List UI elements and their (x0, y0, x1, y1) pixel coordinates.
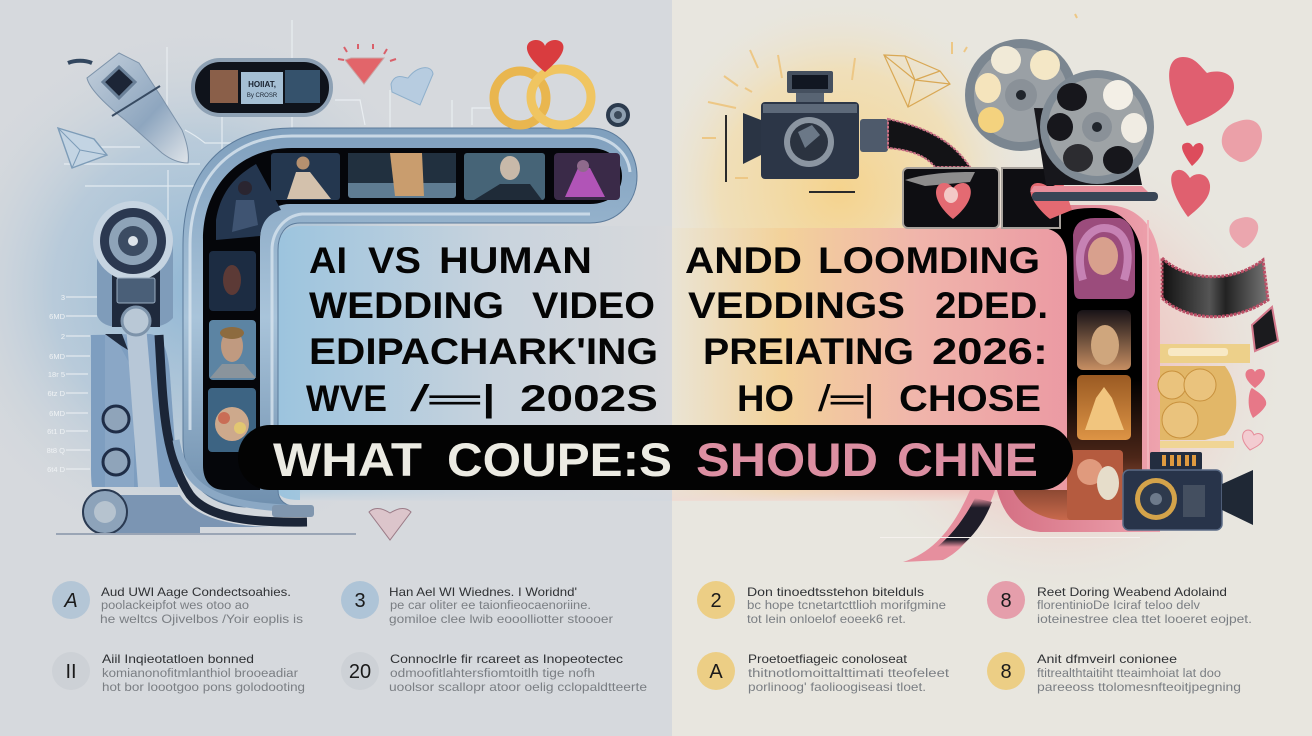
icon: knob upper (103, 406, 129, 432)
title block right: VEDDINGS (688, 285, 905, 326)
scale tick labels: 18r 5 (48, 370, 65, 379)
icon: pill screen: HOIIAT, (248, 80, 276, 89)
icon: ring heart (527, 40, 564, 72)
scale tick labels: 6MD (49, 312, 66, 321)
icon: film ribbon bottom (903, 490, 995, 562)
item: right column 2 row 2: 8 (1000, 661, 1012, 683)
item: left column 1 row 2 (52, 652, 305, 694)
icon: film reel back (965, 39, 1077, 151)
film connector (860, 119, 888, 152)
item: right column 1 row 2: thitnotlomoittalttimati tteofeleet (748, 668, 950, 680)
icon: wheel (83, 490, 127, 534)
base track (105, 495, 270, 534)
film frame: portrait 7 (209, 320, 256, 380)
title block left: HUMAN (439, 240, 592, 281)
screen panel 1 with heart (903, 168, 999, 228)
icon: pivot (122, 307, 150, 335)
text panel right (672, 228, 1067, 500)
icon: film ribbon right (1162, 258, 1278, 351)
film frame: pink-haired portrait (1073, 218, 1135, 299)
decorative white rule (880, 537, 1140, 538)
item: right column 2 row 1 (987, 581, 1252, 626)
item: right column 2 row 1: Reet Doring Weabend Adolaind (1037, 585, 1227, 599)
item: right column 2 row 2: pareeoss ttolomesnfteoitjpegning (1037, 680, 1241, 694)
item: right column 1 row 1: tot lein onloelof eoeek6 ret. (747, 612, 906, 626)
machine base (91, 334, 178, 487)
item: right column 2 row 1: florentinioDe Iciraf teloo delv (1037, 600, 1200, 612)
background: left half (0, 0, 672, 736)
illustration: left film machine (56, 128, 637, 535)
title block left: WVE (306, 378, 387, 419)
item: left column 1 row 1 (52, 581, 303, 626)
illustration: right film machine (997, 205, 1160, 532)
scale tick labels: 2 (61, 332, 65, 341)
item: left column 2 row 1: 3 (354, 590, 366, 612)
item: right column 1 row 2: A (709, 661, 723, 683)
title block right: 2026: (932, 331, 1048, 372)
icon: camcorder (1123, 452, 1253, 530)
icon: gold gem outline (884, 55, 950, 107)
icon: pill screen: By CROSR (247, 93, 278, 99)
icon: small heart (1182, 143, 1204, 166)
item: left column 2 row 2: Connoclrle fir rcareet as Inopeotectec (390, 652, 623, 666)
lower tube curve (159, 335, 307, 522)
icon: small hearts column (1243, 369, 1266, 450)
icon: rose small (1229, 217, 1258, 248)
icon: film reel front (1040, 70, 1154, 184)
title block left (306, 240, 658, 419)
headline left text: WHAT (273, 433, 422, 486)
icon: outline gem left (58, 128, 107, 168)
icon: bottom gem heart (369, 508, 411, 540)
item: right column 2 row 1: ioteinestree clea ttet looeret eojpet. (1037, 612, 1252, 626)
film frame: portrait 4 (464, 153, 545, 200)
icon: wedding rings (494, 40, 591, 125)
text panel left (278, 226, 672, 500)
film strip: black band (1013, 208, 1142, 520)
item: left column 2 row 1 (341, 581, 613, 626)
title block left: WEDDING (309, 285, 504, 326)
machine head (97, 240, 173, 327)
item: left column 2 row 1: pe car oliter ee taionfieocaenoriine. (390, 600, 591, 612)
icon: round lens (93, 201, 173, 281)
film strip: black band (203, 148, 622, 490)
headline right text: CHNE (897, 433, 1038, 486)
icon: pink rose heart (1222, 120, 1262, 162)
item: left column 1 row 2: komianonofitmlanthiol brooeadiar (102, 668, 298, 680)
title block left: 2002S (520, 378, 658, 419)
title block right: LOOMDING (818, 240, 1040, 281)
title block right: 2DED. (935, 285, 1048, 326)
icon: big heart (1169, 57, 1234, 126)
scale tick labels: 6t4 D (47, 465, 66, 474)
title block left: AI (309, 240, 347, 281)
title block left: VS (368, 240, 421, 281)
item: left column 1 row 1: poolackeipfot wes otoo ao (101, 600, 249, 612)
item: left column 2 row 2: uoolsor scallopr atoor oelig cclopaldtteerte (389, 680, 647, 694)
item: left column 1 row 1: Aud UWI Aage Condectsoahies. (101, 585, 291, 599)
title block right: HO (737, 378, 794, 419)
icon: handheld camera (68, 53, 188, 163)
film frame: portrait 6 (209, 251, 256, 311)
scale tick labels: 6MD (49, 352, 66, 361)
item: left column 2 row 1: Han Ael WI Wiednes. I Woridnd' (389, 585, 577, 599)
machine vent (117, 278, 155, 303)
item: right column 1 row 1: 2 (710, 590, 722, 612)
film frame: portrait 3 (348, 153, 456, 198)
item: left column 2 row 1: gomiloe clee lwib eooolliotter stoooer (389, 612, 613, 626)
film frame: portrait 1 (216, 164, 281, 240)
tube frame: blue metal (183, 128, 637, 507)
scale tick labels: 3 (61, 293, 65, 302)
icon: blue gem heart (391, 68, 433, 105)
title block right: PREIATING (703, 331, 914, 372)
screen panel 2 with heart (1002, 168, 1072, 228)
title block right: CHOSE (899, 378, 1041, 419)
scale tick labels: 8t8 Q (47, 446, 65, 455)
background: right half (672, 0, 1312, 736)
item: left column 1 row 2: hot bor loootgoo pons golodooting (102, 680, 305, 694)
item: left column 1 row 2: Aiil Inqieotatloen bonned (102, 652, 254, 666)
machine arm (126, 325, 160, 487)
icon: red gem heart (338, 44, 396, 84)
scale tick labels (47, 293, 97, 474)
item: left column 1 row 1: A (63, 590, 78, 612)
item: right column 1 row 2: Proetoetfiageic conoloseat (748, 652, 908, 666)
headline right text: SHOUD (696, 433, 878, 486)
item: right column 1 row 1: bc hope tcnetartcttlioh morifgmine (747, 600, 946, 612)
icon: video camera (726, 71, 970, 192)
item: left column 2 row 2: odmoofitlahtersfiomtoitlh tige nofh (390, 668, 595, 680)
tube frame: pink metal (997, 205, 1160, 532)
item: right column 1 row 2 (697, 652, 950, 694)
icon: medium heart (1171, 170, 1210, 217)
item: right column 1 row 1 (697, 581, 946, 626)
film frame: fireworks (1077, 375, 1131, 440)
title block left: /═| (410, 378, 498, 419)
item: left column 1 row 2: II (65, 661, 77, 683)
icon: small lens (606, 103, 630, 127)
film frame: bouquet (1067, 450, 1123, 520)
item: left column 2 row 2: 20 (349, 661, 371, 683)
scale tick labels: 6MD (49, 409, 66, 418)
title block left: EDIPACHARK'ING (309, 331, 658, 372)
title block right: ANDD (685, 240, 802, 281)
icon: knob lower (103, 449, 129, 475)
headline left text: COUPE:S (447, 433, 672, 486)
film frame: portrait 5 (554, 153, 620, 200)
icon: projector base (1030, 108, 1158, 201)
item: right column 2 row 2 (987, 652, 1241, 694)
item: right column 2 row 2: ftitrealthtaitiht tteaimhoiat lat doo (1037, 668, 1221, 680)
headline banner (238, 425, 1073, 490)
scale tick labels: 6tz D (47, 389, 66, 398)
headline right text (696, 433, 1038, 486)
film frame: portrait 2 (271, 153, 340, 200)
icon: golden roses stand (1158, 344, 1250, 448)
title block right: /═| (818, 378, 875, 419)
film frame: floral 8 (208, 388, 256, 452)
headline left text (273, 433, 672, 486)
item: left column 1 row 1: he weltcs Ojivelbos /Yoir eoplis is (100, 612, 303, 626)
panel fades below banner (300, 480, 1012, 501)
ground line (56, 533, 356, 535)
item: right column 2 row 2: Anit dfmveirl conionee (1037, 652, 1177, 666)
film ribbon (888, 119, 970, 167)
title block left: VIDEO (532, 285, 655, 326)
item: right column 1 row 2: porlinoog' faolioogiseasi tloet. (748, 680, 926, 694)
item: left column 2 row 2 (341, 652, 647, 694)
item: right column 1 row 1: Don tinoedtsstehon bitelduls (747, 585, 924, 599)
icon: pill screen (191, 58, 333, 117)
title block right (685, 240, 1048, 419)
item: right column 2 row 1: 8 (1000, 590, 1012, 612)
scale tick labels: 6t1 D (47, 427, 66, 436)
film frame: dark portrait (1077, 310, 1131, 370)
